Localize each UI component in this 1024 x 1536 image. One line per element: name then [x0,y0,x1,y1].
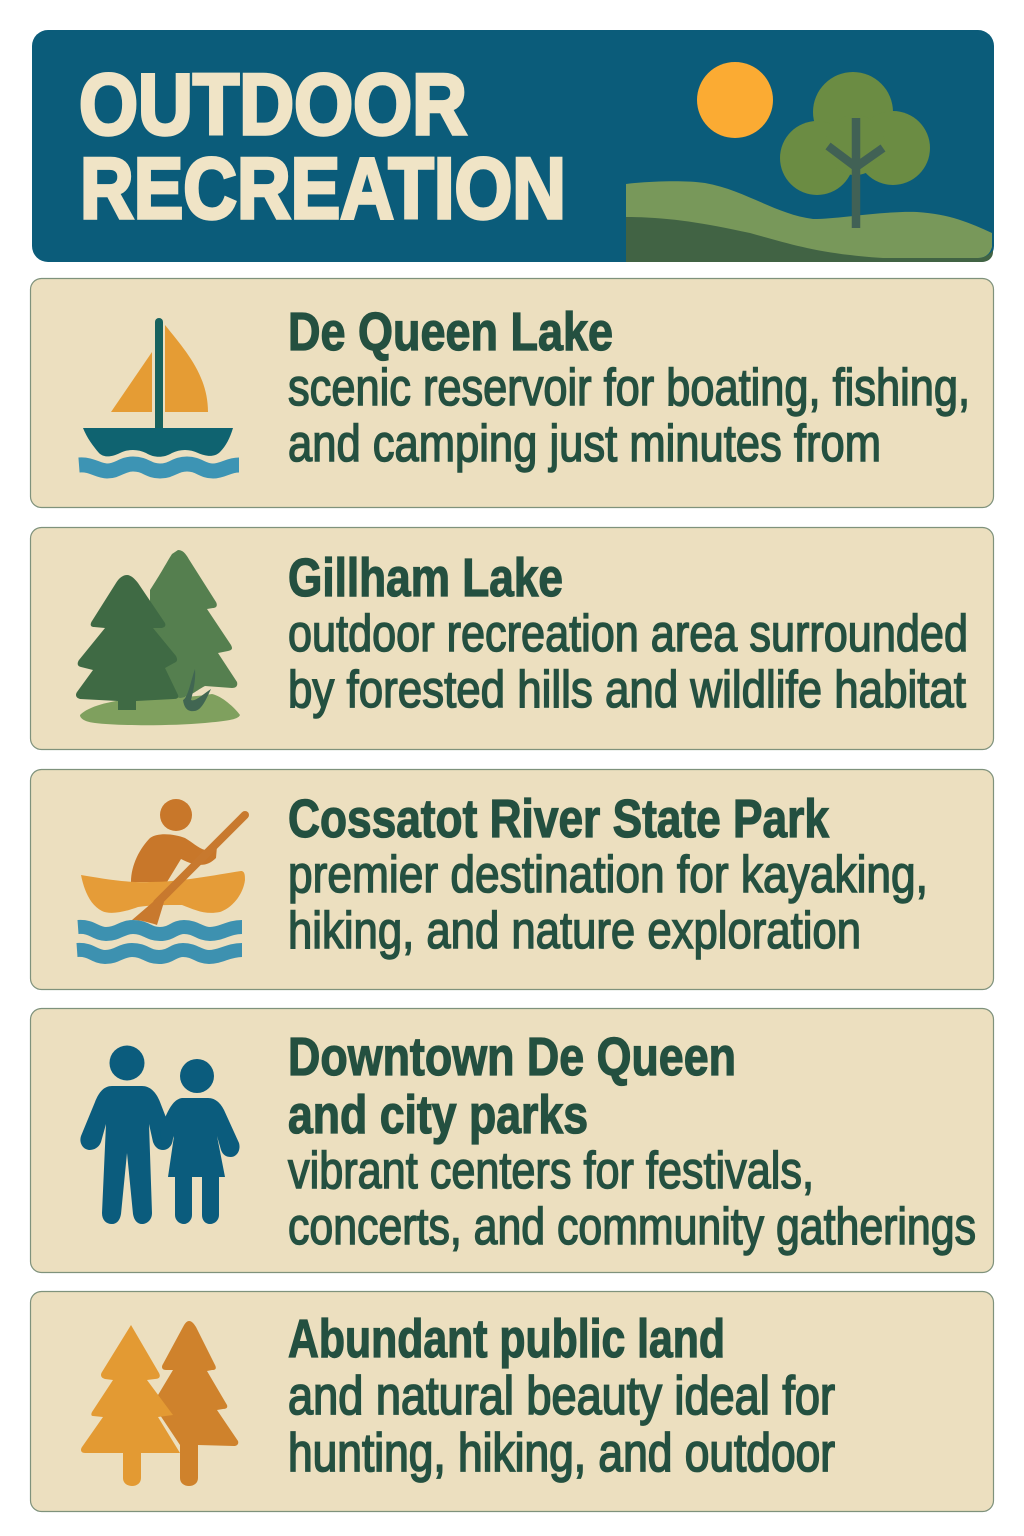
text: De Queen Lake: De Queen Lake [288,302,613,362]
icon: orange pine trees [81,1321,238,1486]
text: Downtown De Queen and city parks [288,1027,976,1256]
panel: De Queen Lake [30,278,994,508]
panel: Downtown De Queen and city parks [30,1008,994,1272]
text: Downtown De Queen and city parks: Downtown De Queen [288,1027,736,1087]
title: OUTDOOR [79,57,467,153]
text: Cossatot River State Park: Cossatot River State Park [288,789,830,849]
icon: two people [80,1046,240,1224]
panel: Abundant public land [30,1292,994,1512]
panel: Gillham Lake [30,528,994,750]
panel: Cossatot River State Park [30,770,994,990]
title: RECREATION [80,141,566,237]
text: Cossatot River State Park [288,789,928,960]
text: De Queen Lake: and camping just minutes from [288,415,881,473]
text: Gillham Lake [288,548,968,719]
icon: kayaker [77,799,245,957]
icon: tree [780,72,930,228]
icon: sailboat [79,318,239,471]
text: Cossatot River State Park: premier destination for kayaking, [288,846,928,904]
text: Downtown De Queen and city parks: and city parks [288,1085,588,1145]
text: Abundant public land: Abundant public land [288,1309,725,1369]
text: De Queen Lake [288,302,970,473]
text: Abundant public land: hunting, hiking, and outdoor [288,1423,835,1483]
title [79,57,566,237]
text: Abundant public land: and natural beauty ideal for [288,1366,835,1426]
text: Abundant public land [288,1309,835,1483]
header banner [32,30,994,262]
icon: sun [697,62,773,138]
icon: forest [76,550,240,725]
text: Gillham Lake: Gillham Lake [288,548,563,608]
text: Downtown De Queen and city parks: vibrant centers for festivals, [288,1142,814,1200]
icon: landscape with hills [626,181,993,262]
text: Cossatot River State Park: hiking, and nature exploration [288,902,861,960]
